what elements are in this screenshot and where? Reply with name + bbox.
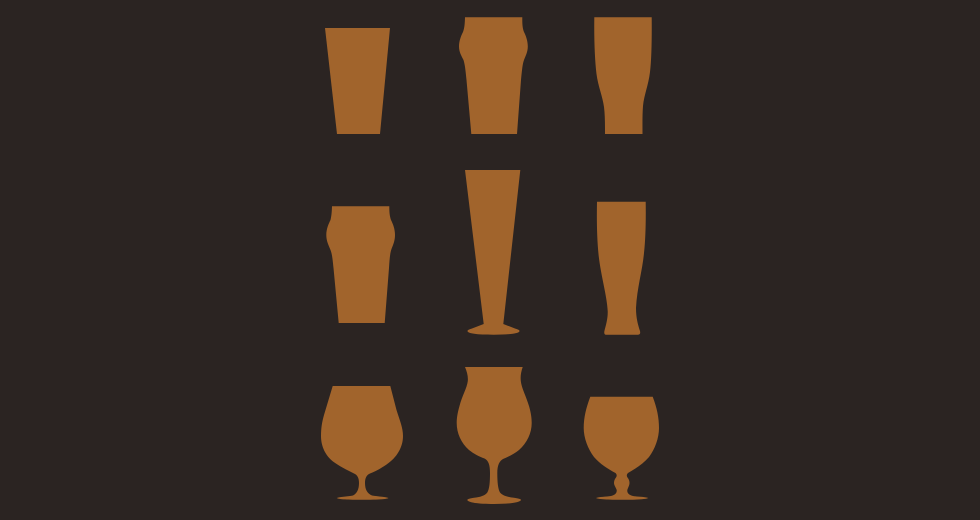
icon: shaker pint glass xyxy=(325,28,390,134)
icon: goblet glass xyxy=(584,397,659,500)
icon: pilsner glass xyxy=(465,170,520,335)
icon: nonic pint glass xyxy=(459,17,528,134)
icon: weizen glass xyxy=(597,202,646,335)
icon: tulip glass xyxy=(457,367,532,504)
icon: imperial nonic glass xyxy=(326,206,395,323)
icon: tulip pint glass xyxy=(594,17,652,134)
icon: snifter glass xyxy=(321,386,403,500)
